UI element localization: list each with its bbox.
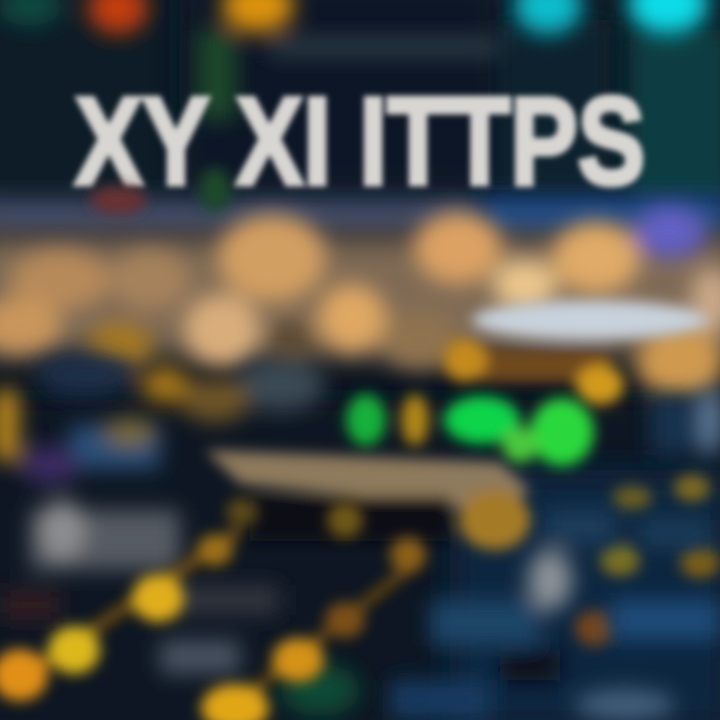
cluster of tan orbs: [0, 206, 720, 400]
green highlights: [346, 394, 594, 466]
dark patches under title: [90, 168, 231, 214]
top indicator lights: [0, 0, 708, 120]
pale platform: [443, 300, 708, 405]
yellow glowing nodes: [0, 474, 720, 720]
lower right blue panels: [390, 386, 720, 720]
mottled dark band: [35, 353, 325, 422]
lower left dark panels: [0, 390, 360, 716]
central tan bar: [205, 450, 531, 550]
